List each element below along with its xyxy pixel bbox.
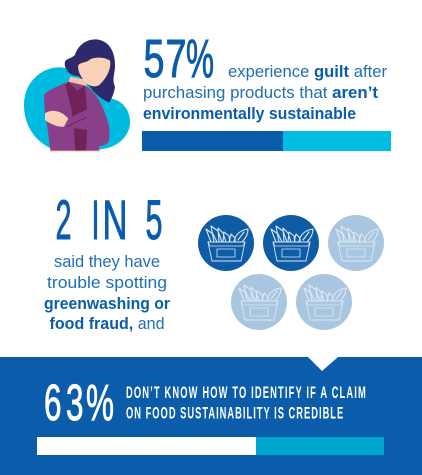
stat heading: 63%: % xyxy=(86,374,114,431)
illustration: woman holding her arm xyxy=(24,39,130,152)
icon: shirt xyxy=(65,82,88,152)
stat heading: 57%: % xyxy=(186,29,214,89)
stat heading: 2 in 5: I xyxy=(92,188,100,251)
panel: bottom blue band xyxy=(0,357,422,475)
stat heading: 57% xyxy=(144,29,214,89)
icon: jacket xyxy=(44,82,110,152)
icon: basket dark xyxy=(198,215,254,271)
text block: guilt statement: environmentally sustainable xyxy=(143,105,356,123)
stat heading: 63%: 3 xyxy=(66,374,84,431)
icon: neck xyxy=(68,77,87,90)
text block: greenwashing statement: said they have xyxy=(54,253,160,271)
stat heading: 2 in 5 xyxy=(56,188,162,251)
stat heading: 57%: 5 xyxy=(144,29,164,89)
progress bar: 57% xyxy=(142,131,391,151)
progress bar: 63% xyxy=(37,437,384,455)
text block: greenwashing statement: food fraud, and xyxy=(50,315,164,333)
icon: basket light xyxy=(231,274,287,330)
icon: face xyxy=(78,58,110,86)
text block: guilt statement xyxy=(143,63,388,123)
icon: basket dark xyxy=(263,215,319,271)
text block: credibility statement: ON FOOD SUSTAINABILITY IS CREDIBLE xyxy=(126,404,343,422)
icon: raised arm xyxy=(65,107,109,146)
stat heading: 2 in 5: 2 xyxy=(56,188,72,251)
text block: credibility statement: DON’T KNOW HOW TO IDENTIFY IF A CLAIM xyxy=(126,383,366,402)
icon: hand xyxy=(45,111,68,127)
stat heading: 57%: 7 xyxy=(166,29,186,89)
text block: guilt statement: purchasing products that aren’t xyxy=(143,84,379,102)
stat heading: 63%: 6 xyxy=(44,374,62,431)
text block: guilt statement: experience guilt after xyxy=(228,63,388,81)
text block: greenwashing statement: greenwashing or xyxy=(44,295,171,313)
icon: basket light xyxy=(296,274,352,330)
stat heading: 63% xyxy=(44,374,114,431)
icon: basket light xyxy=(328,215,384,271)
icon: hair xyxy=(65,39,115,103)
icon group: food baskets, 2 of 5 highlighted xyxy=(198,215,384,330)
stat heading: 2 in 5: 5 xyxy=(146,188,162,251)
text block: greenwashing statement: trouble spotting xyxy=(47,274,167,292)
icon: ground shadow xyxy=(50,151,102,152)
text block: credibility statement xyxy=(126,383,366,422)
stat heading: 2 in 5: N xyxy=(102,188,128,251)
icon: teal blob xyxy=(24,67,130,149)
text block: greenwashing statement xyxy=(44,253,171,333)
